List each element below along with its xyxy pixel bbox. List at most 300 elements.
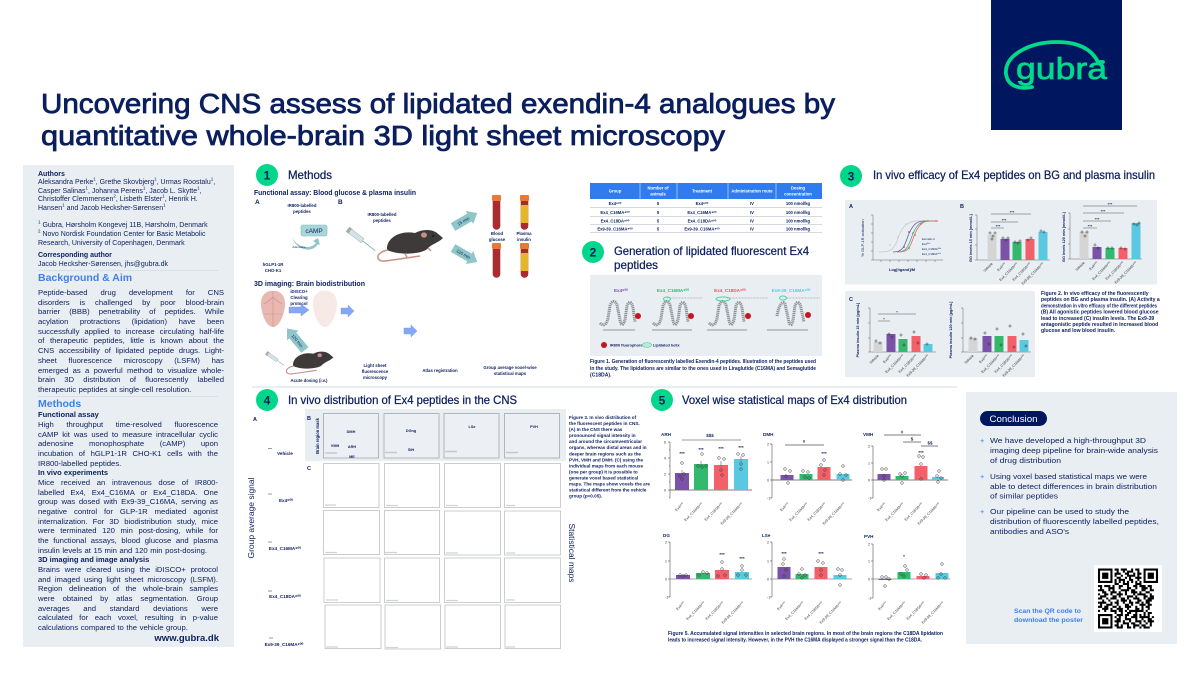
- diagram A: cAMP assay: CHO-K1: [265, 268, 282, 273]
- chart: DG: ***: [719, 552, 725, 557]
- table: study groups: [590, 183, 822, 233]
- text: 3D imaging: calculations compared to the vehicle group.: [38, 623, 188, 632]
- conclusion point 2: +: [980, 472, 984, 481]
- chart: VMH: VMH: [863, 432, 874, 437]
- chart B: blood glucose 120 min: BG levels 120 min [mmol/L]: [1062, 211, 1066, 262]
- heading: In vivo distribution of Ex4 peptides in the CNS: [288, 394, 517, 407]
- arrow: to microscopy: [341, 305, 354, 317]
- chart: LSe: Ex4_C18DA⁸⁰⁰: [804, 600, 824, 621]
- table: study groups: Number of: [648, 186, 669, 190]
- text: background paragraph: brain 3D distribution of fluorescently labelled: [38, 375, 224, 384]
- panel background A and B: [845, 200, 1157, 284]
- clearing protocol label: [290, 289, 308, 306]
- chart: VMH: ***: [918, 450, 924, 455]
- chart: ARH: 2: [664, 472, 666, 476]
- conclusion point 1: [980, 436, 1158, 465]
- text: background paragraph: disorders is challenged by poor blood-brain: [38, 298, 224, 307]
- chart: VMH: Ex4⁸⁰⁰: [876, 501, 887, 512]
- chart B: blood glucose 120 min: ***: [1088, 224, 1093, 228]
- chart C: plasma insulin 15 min: Ex4_C18DA⁸⁰⁰: [898, 353, 918, 374]
- text: background paragraph: barrier (BBB) penetrability of peptides. While: [38, 307, 224, 316]
- text: background paragraph: emerged as a powerful method to visualize whole-: [38, 366, 224, 374]
- figure 3 caption: generate voxel based statistical: [569, 476, 638, 480]
- column A: group average labels: A: [253, 417, 257, 423]
- panel C: statistical maps grid: [307, 464, 560, 649]
- figure 1: peptide illustrations: Lipidated helix: [653, 344, 680, 348]
- panel: conclusion: [966, 392, 1177, 644]
- arrow: 120 min to brain: [281, 324, 311, 355]
- text: functional assay: incubation of hGLP1-1R CHO-K1 cells with the: [38, 449, 218, 458]
- chart A: dose response curves: Exendin-4: [922, 237, 935, 241]
- title: quantitative whole-brain 3D light sheet microscopy: [41, 120, 725, 151]
- conclusion point 3: antibodies and ASO’s: [990, 527, 1069, 536]
- title: Uncovering CNS assess of lipidated exendin-4 analogues by: [41, 88, 835, 119]
- conclusion point 1: of drug distribution: [990, 456, 1061, 465]
- chart C: plasma insulin 120 min: Ex4_C18DA⁸⁰⁰: [994, 353, 1014, 374]
- affiliations: [38, 220, 208, 247]
- panel B: brain region masks: Brain region mask: [315, 417, 320, 454]
- QR code caption: Scan the QR code to: [1014, 609, 1081, 615]
- chart C: plasma insulin 15 min: *: [883, 316, 885, 322]
- chart: VMH: $: [911, 436, 914, 442]
- text: in vivo experiments: negative control for GLP-1R mediated agonist: [38, 507, 218, 516]
- subheading: functional assay: Functional assay: [38, 410, 99, 419]
- chart: PVH: 0: [868, 578, 870, 582]
- corresponding author: Corresponding author: [38, 252, 112, 259]
- label: microscopy: microscopy: [363, 375, 388, 380]
- conclusion point 3: distribution of fluorescently labelled peptides,: [990, 517, 1159, 526]
- text: 3D imaging: Region delineation of the whole-brain samples: [38, 584, 218, 593]
- figure 3 caption: individual maps from each mouse: [569, 464, 643, 468]
- chart C: plasma insulin 15 min: Plasma insulin 15 min [pg/mL]: [856, 302, 860, 357]
- label: statistical maps: Statistical maps: [567, 524, 576, 582]
- figure 1 caption: in the study. The lipidations are similar to the ones used in Liraglutide (C16MA) and Semaglutide: [590, 366, 816, 372]
- text: 3D imaging: calculated for each voxel, resulting in p-value: [38, 613, 218, 622]
- section number 2: 2: [590, 246, 597, 260]
- chart A: dose response curves: [849, 204, 943, 272]
- chart: PVH: Ex4_C18DA⁸⁰⁰: [906, 600, 926, 621]
- panel B: brain region masks: ME: [349, 455, 355, 459]
- chart: VMH: 1: [868, 462, 870, 466]
- arrow: 120 min: 120 min: [455, 248, 472, 260]
- chart: ARH: ARH: [661, 432, 672, 437]
- figure 5 caption: Figure 5. Accumulated signal intensities in selected brain regions. In most of the brain regions the C18DA lipidation: [668, 631, 943, 637]
- chart: ARH: Ex4_C16MA⁸⁰⁰: [683, 501, 704, 522]
- conclusion point 2: able to detect differences in brain distribution: [990, 482, 1157, 491]
- chart B: blood glucose 15 min: B: [960, 204, 964, 210]
- heading: background and aim: Background & Aim: [38, 272, 132, 284]
- text: in vivo experiments: internalization. For 3D biodistribution study, mice: [38, 517, 218, 526]
- panel B: brain region masks: B: [307, 416, 311, 422]
- brain after clearing: [313, 291, 337, 327]
- conclusion point 1: We have developed a high-throughput 3D: [990, 436, 1146, 445]
- conclusion point 3: +: [980, 507, 984, 516]
- table: study groups: animals: [650, 192, 666, 196]
- column A: group average labels: Group average signal: [247, 477, 256, 558]
- figure 3 caption: [569, 415, 650, 498]
- label: microscopy: fluorescence: [362, 369, 389, 374]
- diagram A: cAMP assay: hGLP1-1R: [263, 262, 284, 267]
- figure 1: peptide illustrations: Ex4⁸⁰⁰: [614, 288, 628, 293]
- figure 2 caption: antagonistic peptide resulted in increased blood: [1041, 322, 1158, 328]
- chart: LSe: Ex4_C16MA⁸⁰⁰: [784, 600, 805, 621]
- section number 1: [256, 164, 278, 186]
- chart A: dose response curves: Ex4_C16MA⁸⁰⁰: [922, 247, 942, 251]
- text: functional assay: adenosine monophosphate (cAMP) upon: [38, 439, 218, 448]
- chart: DMH: Ex9-39_C16MA⁸⁰⁰: [822, 501, 846, 526]
- panel B: brain region masks: LSe: [469, 425, 475, 429]
- corresponding author: Jacob Hecksher-Sørensen, jhs@gubra.dk: [38, 261, 168, 268]
- figure 2 caption: [1041, 291, 1171, 334]
- section number 5: 5: [659, 394, 666, 408]
- chart B: blood glucose 120 min: Vehicle: [1075, 261, 1086, 272]
- chart: ARH: 0: [664, 488, 666, 492]
- chart C: plasma insulin 15 min: Ex4⁸⁰⁰: [882, 353, 893, 364]
- figure 5 caption: leads to increased signal intensity. However, in the PVH the C16MA displayed a stronger signal than the C18DA.: [668, 638, 923, 644]
- panel background C: [845, 291, 1035, 377]
- chart: VMH: Ex4_C18DA⁸⁰⁰: [904, 501, 924, 522]
- chart: DG: Ex4_C18DA⁸⁰⁰: [705, 600, 725, 621]
- chart: LSe: LSe: [762, 533, 771, 538]
- figure 1 caption: [590, 359, 816, 378]
- chart: PVH: *: [903, 554, 905, 559]
- label: statistical maps: Group average voxel-wise: [483, 365, 537, 370]
- text: 3D imaging: [38, 565, 218, 632]
- clearing protocol label: iDISCO+: [290, 289, 308, 294]
- panel 5: voxel wise statistics: [651, 389, 950, 644]
- figure 1: peptide illustrations: Ex4_C18DA⁸⁰⁰: [714, 288, 746, 293]
- figure 3 caption: organs, whereas distal areas and in: [569, 445, 647, 450]
- QR code caption: download the poster: [1014, 618, 1084, 624]
- chart C: plasma insulin 120 min: Ex9-39_C16MA⁸⁰⁰: [1002, 353, 1026, 378]
- table: study groups: 100 nmol/kg: [786, 201, 811, 206]
- chart: PVH: Ex4_C16MA⁸⁰⁰: [886, 600, 907, 621]
- text: background paragraph: [38, 288, 224, 394]
- table: study groups: Dosing: [791, 186, 806, 190]
- chart: DMH: [763, 432, 852, 526]
- figure 1: peptide illustrations: IR800 fluorophore: [610, 344, 642, 348]
- table: study groups: IV: [750, 201, 754, 206]
- chart: LSe: 0: [767, 578, 769, 582]
- chart B: blood glucose 120 min: Ex4⁸⁰⁰: [1088, 260, 1099, 271]
- heading: Generation of lipidated fluorescent Ex4: [614, 245, 809, 258]
- chart: DMH: ***: [821, 451, 827, 456]
- chart B: blood glucose 15 min: Vehicle: [983, 262, 994, 273]
- table: study groups: 5: [657, 201, 660, 206]
- figure 3 caption: pronounced signal intensity in: [569, 433, 636, 438]
- website url: www.gubra.dk: [154, 633, 219, 644]
- label: statistical maps: [483, 365, 537, 376]
- chart B: blood glucose 15 min: BG levels 15 min [mmol/L]: [969, 214, 973, 262]
- column A: group average labels: Vehicle: [277, 451, 293, 456]
- label: microscopy: [362, 363, 389, 380]
- conclusion point 2: Using voxel based statistical maps we were: [990, 472, 1147, 481]
- chart: DMH: Ex4⁸⁰⁰: [779, 501, 790, 512]
- heading: methods: Methods: [38, 398, 81, 410]
- table: study groups: Ex4_C16MA⁸⁰⁰: [687, 210, 717, 215]
- figure 3 caption: the fluorescent peptides in CNS.: [569, 421, 640, 426]
- panel B: brain region masks: DMH: [347, 430, 356, 434]
- text: background paragraph: acylation protractions (lipidation) have been: [38, 317, 224, 326]
- chart: DG: ***: [739, 556, 745, 561]
- panel B: brain region masks: DGng: [406, 429, 417, 433]
- affiliations: 1 Gubra, Hørsholm Kongevej 11B, Hørsholm, Denmark: [38, 220, 208, 229]
- title: [41, 88, 836, 152]
- text: background paragraph: therapeutic peptides at single-cell resolution.: [38, 385, 191, 394]
- section number 1: 1: [264, 168, 271, 182]
- figure 3 caption: statistical different from the vehicle: [569, 488, 647, 492]
- text: 3D imaging: averages and standard deviations were: [38, 604, 218, 613]
- diagram A: cAMP assay: Adenosine: [292, 245, 306, 249]
- heading: methods: Methods: [288, 169, 332, 182]
- figure 3 caption: group (p<0.05).: [569, 494, 602, 498]
- chart B: blood glucose 15 min: Ex4_C18DA⁸⁰⁰: [1012, 261, 1032, 282]
- authors list: Christoffer Clemmensen2, Lisbeth Elster1, Henrik H.: [38, 194, 198, 203]
- subheading: 3D imaging and image analysis: 3D imaging and image analysis: [38, 555, 149, 564]
- table: study groups: Ex4_C16MA⁸⁰⁰: [600, 210, 630, 215]
- column A: group average labels: Ex4_C18DA⁸⁰⁰: [269, 594, 301, 599]
- panel C: statistical maps grid: C: [307, 466, 311, 472]
- section number 2: [582, 241, 604, 263]
- chart: VMH: 0: [868, 478, 870, 482]
- affiliations: 2 Novo Nordisk Foundation Center for Basic Metabolic: [38, 228, 205, 238]
- authors list: Casper Salinas1, Johanna Perens1, Jacob L. Skytte1,: [38, 185, 202, 195]
- chart: PVH: Ex4⁸⁰⁰: [877, 600, 888, 611]
- text: 3D imaging: Brains were cleared using the iDISCO+ protocol: [38, 565, 218, 574]
- chart: DMH: #: [803, 439, 806, 444]
- label: microscopy: Light sheet: [364, 363, 387, 368]
- chart: ARH: ***: [718, 446, 724, 451]
- panel 4: in vivo distribution: [247, 389, 650, 650]
- affiliations: Research, University of Copenhagen, Denmark: [38, 240, 185, 247]
- chart: VMH: $$: [927, 440, 933, 446]
- authors list: Aleksandra Perke1, Grethe Skovbjerg1, Urmas Roostalu1,: [38, 177, 215, 186]
- conclusion point 1: imaging deep pipeline for brain-wide analysis: [990, 446, 1158, 455]
- chart: DG: DG: [663, 533, 670, 538]
- chart: ARH: ***: [738, 445, 744, 450]
- chart B: blood glucose 15 min: Ex4_C16MA⁸⁰⁰: [998, 261, 1019, 282]
- chart B: blood glucose 15 min: [960, 204, 1050, 286]
- chart: VMH: Ex9-39_C16MA⁸⁰⁰: [917, 501, 941, 526]
- chart C: plasma insulin 120 min: Ex4_C16MA⁸⁰⁰: [980, 353, 1001, 374]
- chart: LSe: Ex9-39_C16MA⁸⁰⁰: [819, 600, 843, 625]
- table: study groups: Ex4_C18DA⁸⁰⁰: [601, 218, 630, 224]
- subheading: 3D imaging: 3D imaging: Brain biodistribution: [254, 279, 365, 288]
- QR code: [1094, 565, 1162, 632]
- text: in vivo experiments: Mice received an intravenous dose of IR800-: [38, 478, 218, 487]
- table: study groups: 5: [657, 226, 660, 232]
- diagram A: cAMP assay: IR800-labelled: [288, 203, 317, 208]
- table: study groups: 100 nmol/kg: [786, 226, 811, 232]
- table: study groups: 5: [657, 210, 660, 215]
- panel B: brain region masks: SIH: [408, 448, 414, 452]
- chart A: dose response curves: Ex4_C18DA⁸⁰⁰: [922, 252, 942, 256]
- table: study groups: Ex4⁸⁰⁰: [609, 201, 622, 206]
- chart: ARH: Ex4_C18DA⁸⁰⁰: [704, 501, 724, 522]
- panel B: brain region masks: VMH: [331, 444, 339, 448]
- panel B: brain region masks: [305, 409, 566, 461]
- chart B: blood glucose 120 min: ***: [1101, 208, 1106, 214]
- chart A: dose response curves: Ex4⁸⁰⁰: [922, 242, 931, 246]
- chart: VMH: -1: [868, 496, 871, 500]
- chart: VMH: #: [901, 430, 904, 434]
- section number 4: 4: [264, 394, 271, 408]
- text: functional assay: cAMP kit was used to measure intracellular cyclic: [38, 430, 218, 439]
- chart B: blood glucose 15 min: ***: [996, 224, 1001, 228]
- conclusion point 3: [980, 507, 1159, 536]
- chart: DG: 0: [665, 578, 667, 582]
- column A: group average labels: Ex4_C16MA⁸⁰⁰: [269, 546, 301, 551]
- QR code caption: [1014, 609, 1084, 624]
- panel: authors, background and methods sidebar: [23, 165, 234, 647]
- blood sample tubes: Blood: [491, 231, 503, 236]
- figure 1 caption: Figure 1. Generation of fluorescently labelled Exendin-4 peptides. Illustration of the peptides used: [590, 359, 816, 365]
- table: study groups: concentration: [784, 192, 812, 196]
- conclusion pill: Conclusion: [990, 414, 1038, 425]
- authors list: Hansen1 and Jacob Hecksher-Sørensen1: [38, 202, 166, 212]
- section number 5: [651, 389, 673, 411]
- chart B: blood glucose 120 min: ***: [1108, 202, 1113, 206]
- panel 1: methods: [254, 164, 537, 383]
- chart: DG: 1: [665, 560, 667, 564]
- chart: ARH: Ex9-39_C16MA⁸⁰⁰: [720, 501, 744, 526]
- chart C: plasma insulin 15 min: C: [849, 297, 853, 303]
- arrow: 120 min to brain: 120 min: [290, 333, 304, 349]
- table: study groups: IV: [750, 226, 754, 232]
- chart B: blood glucose 15 min: Ex4⁸⁰⁰: [996, 261, 1007, 272]
- column A: group average labels: [247, 417, 304, 647]
- arrow: to atlas registration: [404, 325, 417, 337]
- diagram A: cAMP assay: peptides: [293, 209, 311, 214]
- chart: ARH: ***: [698, 447, 704, 452]
- heading: peptides: [614, 259, 658, 272]
- chart C: plasma insulin 120 min: Vehicle: [964, 354, 975, 365]
- table: study groups: IV: [750, 218, 754, 224]
- heading: Voxel wise statistical maps of Ex4 distribution: [682, 394, 907, 407]
- diagram B: dosing mouse: peptides: [373, 218, 391, 223]
- chart B: blood glucose 15 min: Ex9-39_C16MA⁸⁰⁰: [1021, 261, 1045, 286]
- figure 2 caption: Figure 2. In vivo efficacy of the fluorescently: [1041, 291, 1149, 297]
- heading: [614, 245, 809, 272]
- divider between rows: [252, 386, 957, 388]
- text: functional assay: IR800-labelled peptides.: [38, 459, 121, 468]
- text: in vivo experiments: [38, 478, 218, 555]
- dosing mouse for imaging: [265, 351, 333, 383]
- text: functional assay: [38, 420, 218, 468]
- label: statistical maps: statistical maps: [494, 371, 527, 376]
- figure 2 caption: glucose and low blood insulin.: [1041, 328, 1116, 334]
- chart: LSe: Ex4⁸⁰⁰: [776, 600, 787, 611]
- authors list: Authors: [38, 171, 65, 178]
- blood sample tubes: Plasma: [516, 231, 532, 236]
- text: background paragraph: sheet fluorescence microscopy (LSFM) has: [38, 356, 224, 365]
- logo: gubra: [991, 0, 1122, 130]
- chart: LSe: ***: [781, 551, 787, 556]
- figure 1: peptide illustrations: Ex4_C16MA⁸⁰⁰: [657, 288, 689, 293]
- chart: LSe: [762, 533, 852, 625]
- subheading: functional assay: Functional assay: Blood glucose & plasma insulin: [254, 188, 416, 197]
- chart: PVH: [864, 534, 950, 625]
- conclusion point 3: Our pipeline can be used to study the: [990, 507, 1129, 516]
- chart: DMH: Ex4_C16MA⁸⁰⁰: [788, 501, 809, 522]
- table: study groups: 100 nmol/kg: [786, 210, 811, 215]
- chart B: blood glucose 15 min: ***: [1002, 218, 1007, 222]
- chart C: plasma insulin 15 min: Ex9-39_C16MA⁸⁰⁰: [906, 353, 930, 378]
- table: study groups: IV: [750, 210, 754, 215]
- chart B: blood glucose 120 min: Ex4_C18DA⁸⁰⁰: [1105, 260, 1125, 281]
- diagram B: dosing mouse: IR800-labelled: [368, 212, 397, 217]
- blood sample tubes: insulin: [517, 237, 531, 242]
- figure 5 caption: [668, 631, 943, 644]
- table: study groups: Group: [609, 188, 622, 194]
- chart: PVH: 1: [868, 560, 870, 564]
- chart A: dose response curves: A: [849, 204, 853, 210]
- chart: DG: [663, 533, 752, 625]
- arrow: 120 min: [449, 242, 481, 268]
- chart: LSe: ***: [818, 551, 824, 556]
- blood sample tubes: [489, 195, 532, 278]
- diagram A: cAMP assay: A: [255, 199, 260, 206]
- clearing protocol label: protocol: [290, 301, 308, 306]
- figure 1: peptide illustrations: [590, 275, 822, 356]
- logo: gubra: gubra: [1016, 51, 1108, 86]
- text: in vivo experiments: labelled Ex4, Ex4_C16MA or Ex4_C18DA. One: [38, 488, 218, 497]
- chart B: blood glucose 15 min: ***: [1010, 210, 1015, 214]
- chart: ARH: 4: [664, 456, 666, 460]
- figure 3 caption: (one per group) it is possible to: [569, 470, 638, 474]
- text: 3D imaging: were obtained by atlas segmentation. Group: [38, 594, 218, 603]
- figure 1 caption: (C18DA).: [590, 372, 612, 378]
- chart: DG: Ex4_C16MA⁸⁰⁰: [685, 600, 706, 621]
- table: study groups: Ex4⁸⁰⁰: [696, 201, 709, 206]
- corresponding author: [38, 252, 168, 268]
- chart C: plasma insulin 15 min: Ex4_C16MA⁸⁰⁰: [884, 353, 905, 374]
- text: background paragraph: successfully applied to increase circulating half-life: [38, 327, 224, 336]
- chart: VMH: 2: [868, 444, 870, 448]
- arrow: 15 min: 15 min: [457, 215, 471, 226]
- label: atlas registration: Atlas registration: [422, 368, 458, 373]
- conclusion point 1: +: [980, 436, 984, 445]
- text: functional assay: High throughput time-resolved fluorescence: [38, 420, 218, 429]
- figure 3 caption: maps. The maps show voxels the are: [569, 482, 650, 486]
- chart: LSe: -1: [767, 596, 770, 600]
- figure 3 caption: deeper brain regions such as the: [569, 452, 641, 456]
- table: study groups: Ex4_C18DA⁸⁰⁰: [688, 218, 717, 224]
- subheading: in vivo experiments: In vivo experiments: [38, 468, 108, 477]
- chart B: blood glucose 120 min: ***: [1095, 216, 1100, 222]
- column A: group average labels: Ex4⁸⁰⁰: [279, 498, 293, 503]
- chart: PVH: PVH: [864, 534, 874, 539]
- diagram B: dosing mouse: [338, 199, 443, 261]
- diagram B: dosing mouse: B: [338, 199, 343, 206]
- chart: ARH: ***: [679, 451, 685, 456]
- chart: PVH: Ex9-39_C16MA⁸⁰⁰: [921, 600, 945, 625]
- text: in vivo experiments: group was dosed with Ex9-39_C16MA, serving as: [38, 497, 218, 506]
- dosing mouse for imaging: Acute dosing (i.v.): [291, 378, 328, 383]
- chart B: blood glucose 120 min: [1062, 202, 1142, 285]
- clearing protocol label: Clearing: [290, 295, 308, 300]
- chart C: plasma insulin 15 min: [849, 297, 936, 378]
- panel B: brain region masks: ARH: [348, 445, 356, 449]
- text: background paragraph: Peptide-based drug development for CNS: [38, 288, 224, 297]
- figure 3 caption: Figure 3. In vivo distribution of: [569, 415, 637, 420]
- chart C: plasma insulin 120 min: Ex4⁸⁰⁰: [978, 353, 989, 364]
- chart: DMH: 1: [767, 460, 769, 464]
- chart: PVH: -1: [868, 596, 871, 600]
- chart B: blood glucose 120 min: Ex9-39_C16MA⁸⁰⁰: [1114, 260, 1138, 285]
- chart: DMH: DMH: [763, 432, 774, 437]
- chart B: blood glucose 120 min: Ex4_C16MA⁸⁰⁰: [1091, 260, 1112, 281]
